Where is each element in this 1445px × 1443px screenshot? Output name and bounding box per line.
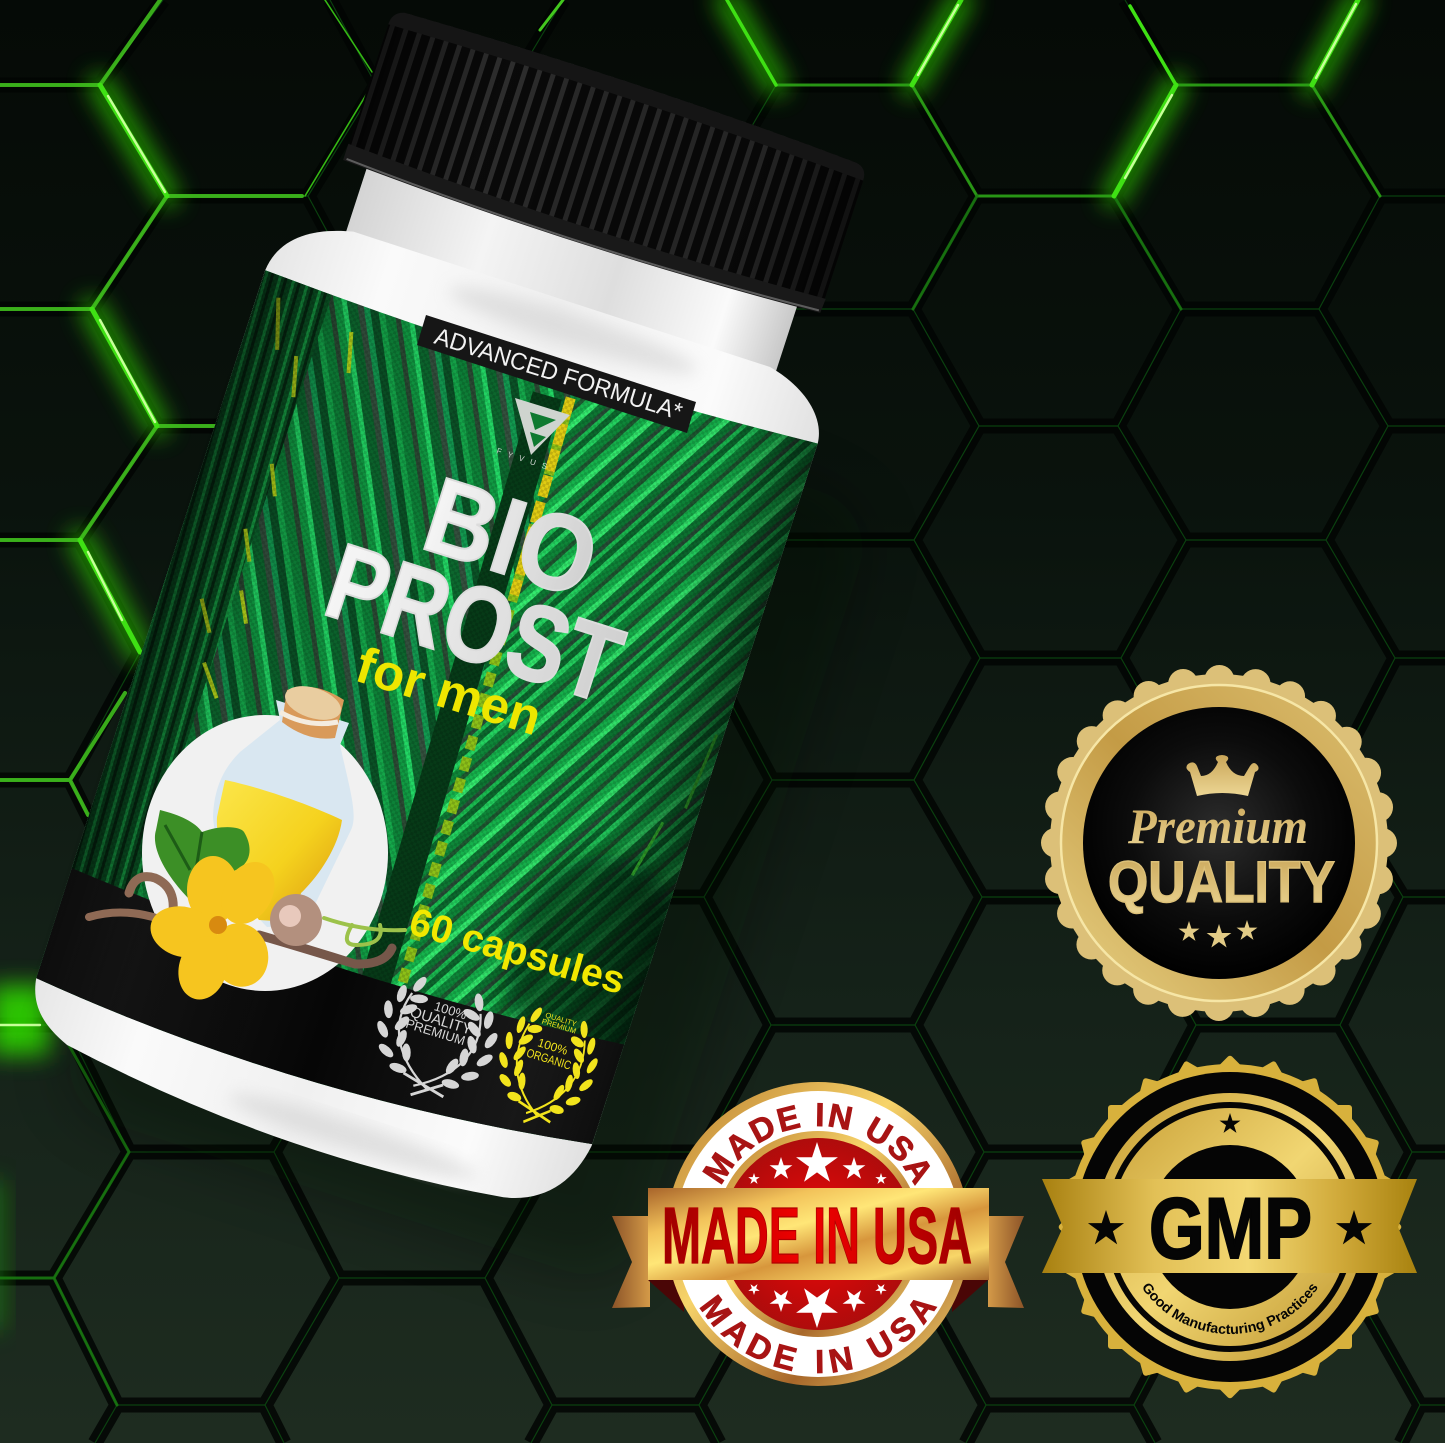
gold rim [1061, 685, 1377, 1001]
crown icon [1186, 755, 1259, 796]
ribbon tails [612, 1216, 650, 1308]
silver laurel [358, 966, 512, 1115]
gold laurel: QUALITY [544, 1010, 578, 1028]
black centre [1148, 1145, 1312, 1309]
badge: gmp [1042, 1056, 1417, 1398]
green label [36, 270, 818, 1144]
bottle drop shadow [54, 325, 878, 1290]
bottle body [35, 13, 864, 1198]
60 capsules: 60 capsules [405, 900, 630, 1003]
vanilla stems [89, 877, 405, 964]
label illustration [89, 680, 405, 1005]
scalloped gold edge [1050, 674, 1388, 1012]
serrated gold edge [1062, 1059, 1398, 1395]
gold laurel [481, 998, 611, 1138]
ribbon text: MADE IN USA [662, 1191, 972, 1280]
badge: premium quality [1050, 674, 1388, 1012]
top stars [748, 1142, 887, 1184]
three stars [1179, 920, 1257, 948]
bottom arc text: MADE IN USA [699, 1294, 938, 1374]
quality word: QUALITY [1108, 850, 1335, 915]
medal ring [666, 1082, 970, 1386]
silver laurel: 100% [432, 998, 469, 1023]
arc caption: Good Manufacturing Practices [1143, 1284, 1318, 1334]
black ring [1075, 1072, 1385, 1382]
top arc text: MADE IN USA [702, 1102, 930, 1186]
silver laurel: QUALITY [408, 1004, 474, 1039]
bottle cap [341, 6, 871, 321]
yellow flower [145, 852, 285, 1005]
black band [36, 868, 624, 1144]
product name BIO: BIO [411, 454, 612, 621]
plastic body [11, 209, 838, 1231]
brand logo [495, 398, 570, 473]
main ribbon [648, 1188, 989, 1280]
gold laurel: ORGANIC [525, 1046, 573, 1073]
for men: for men [350, 636, 548, 746]
vanilla ball [270, 894, 322, 946]
gold laurel: 100% [536, 1036, 570, 1058]
ribbon folds [648, 1280, 684, 1312]
red centre [715, 1131, 921, 1337]
brand logo: FYVUS [495, 446, 554, 473]
product bottle [35, 13, 864, 1198]
black centre [1083, 707, 1355, 979]
gold ribbon [1042, 1179, 1417, 1273]
green leaf [155, 810, 250, 900]
premium script: Premium [1127, 798, 1308, 854]
top star [1220, 1113, 1240, 1133]
bottle neck [342, 159, 800, 384]
advanced formula text: ADVANCED FORMULA* [431, 323, 685, 426]
product name PROST: PROST [313, 520, 636, 726]
silver laurel: PREMIUM [404, 1016, 467, 1048]
white circle [142, 715, 388, 991]
badge: made in usa [612, 1082, 1024, 1386]
oil bottle [213, 680, 354, 927]
gmp letters: GMP [1149, 1181, 1312, 1277]
bottom stars [748, 1284, 887, 1328]
ribbon stars [1088, 1210, 1372, 1244]
gold laurel: PREMIUM [541, 1017, 577, 1036]
advanced formula strip [417, 315, 696, 433]
